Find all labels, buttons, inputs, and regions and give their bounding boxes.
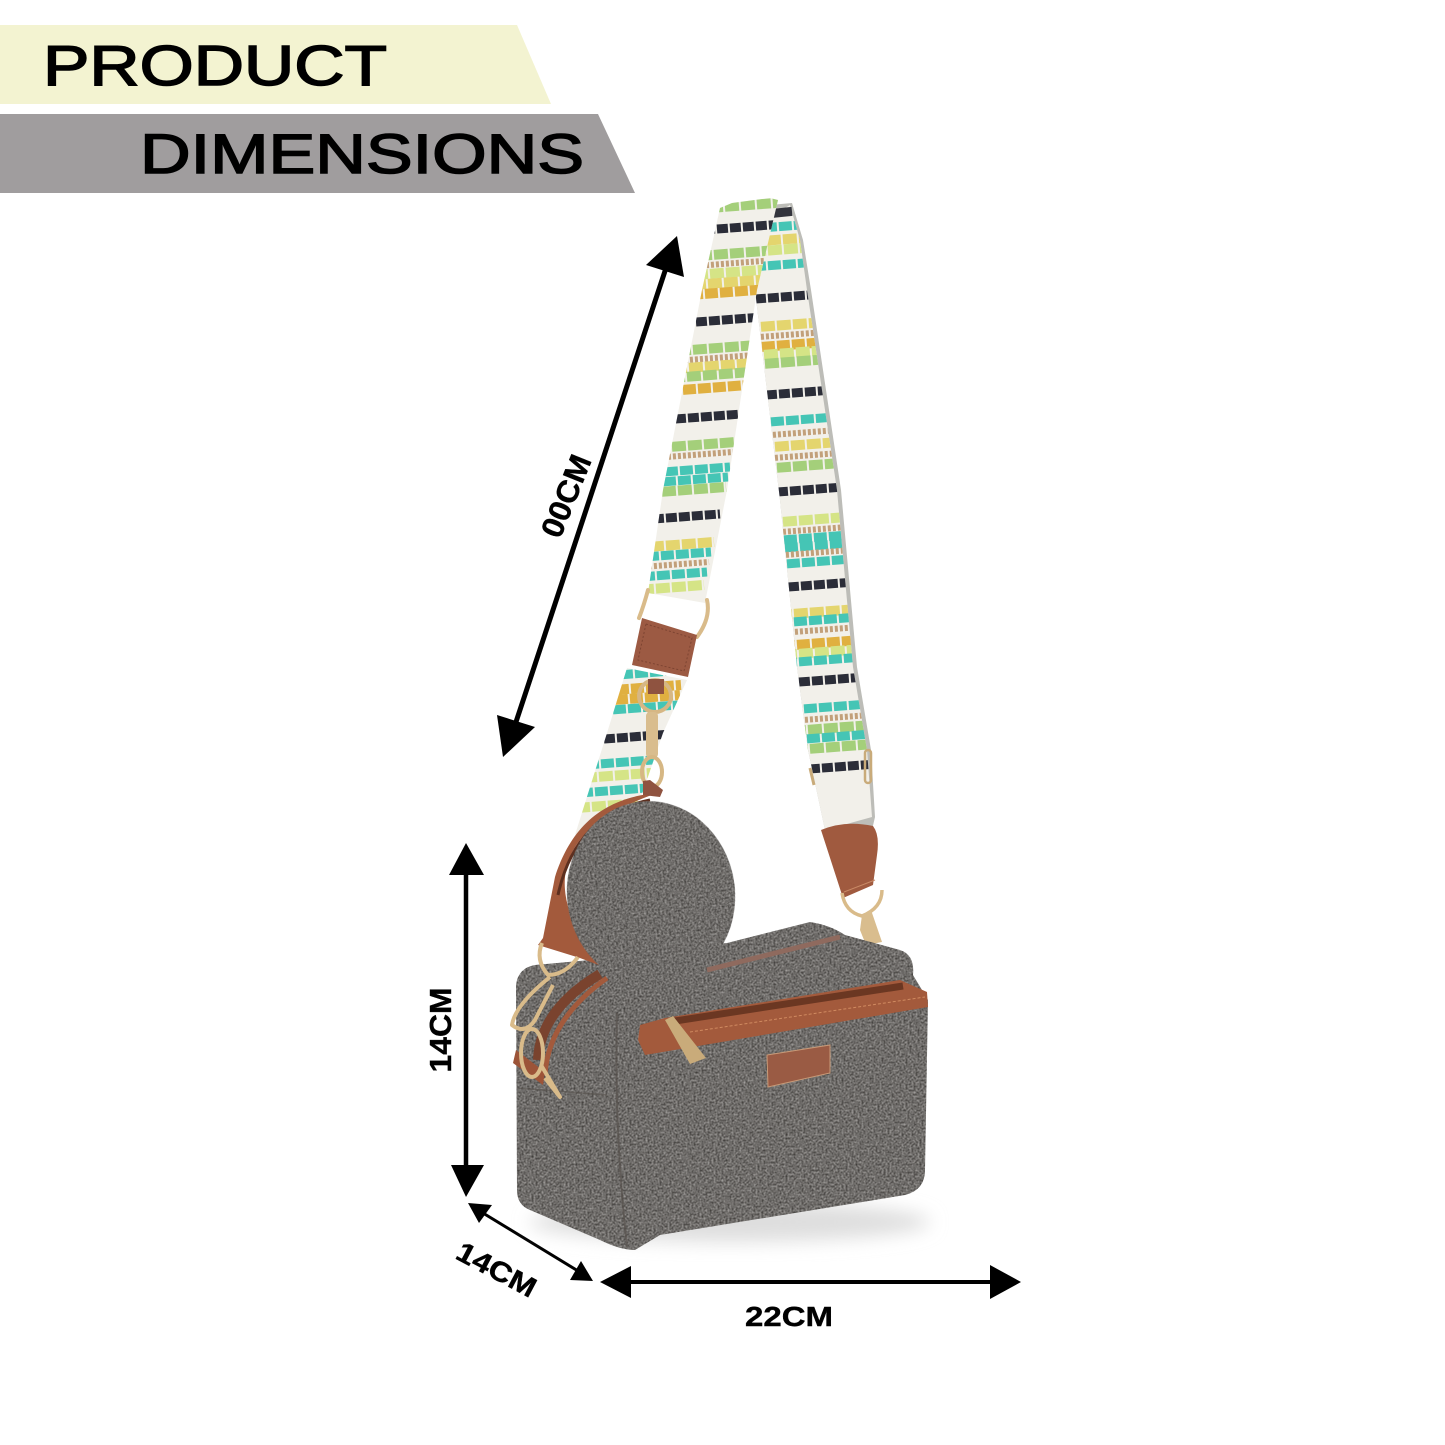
left strap [575,198,789,835]
product photo: bag with strap and pouch [512,198,930,1250]
strap slider and end tab [810,750,882,945]
label: width 22CM: 22CM [745,1301,833,1332]
side clasp hardware [512,943,578,1097]
bag body [516,922,928,1250]
arrow: depth [468,1203,593,1281]
heading banner: DIMENSIONS: DIMENSIONS [140,122,584,185]
brand patch [767,1045,830,1087]
label: height 14CM: 14CM [423,988,458,1072]
strap buckle and leather tab [632,590,708,787]
arrow: width [600,1265,1021,1299]
side zipper [513,974,607,1085]
coin pouch [538,780,747,998]
heading banner: DIMENSIONS [0,114,635,193]
right strap [756,203,875,828]
bag shadow [530,1202,930,1242]
heading banner: PRODUCT [0,25,551,104]
heading banner: PRODUCT: PRODUCT [43,34,387,98]
label: depth 14CM: 14CM [451,1236,542,1303]
label: strap length 00CM: 00CM [534,450,599,542]
arrow: height [449,843,484,1197]
arrow: strap length [497,236,684,757]
front pocket zipper and leather trim [638,980,928,1064]
